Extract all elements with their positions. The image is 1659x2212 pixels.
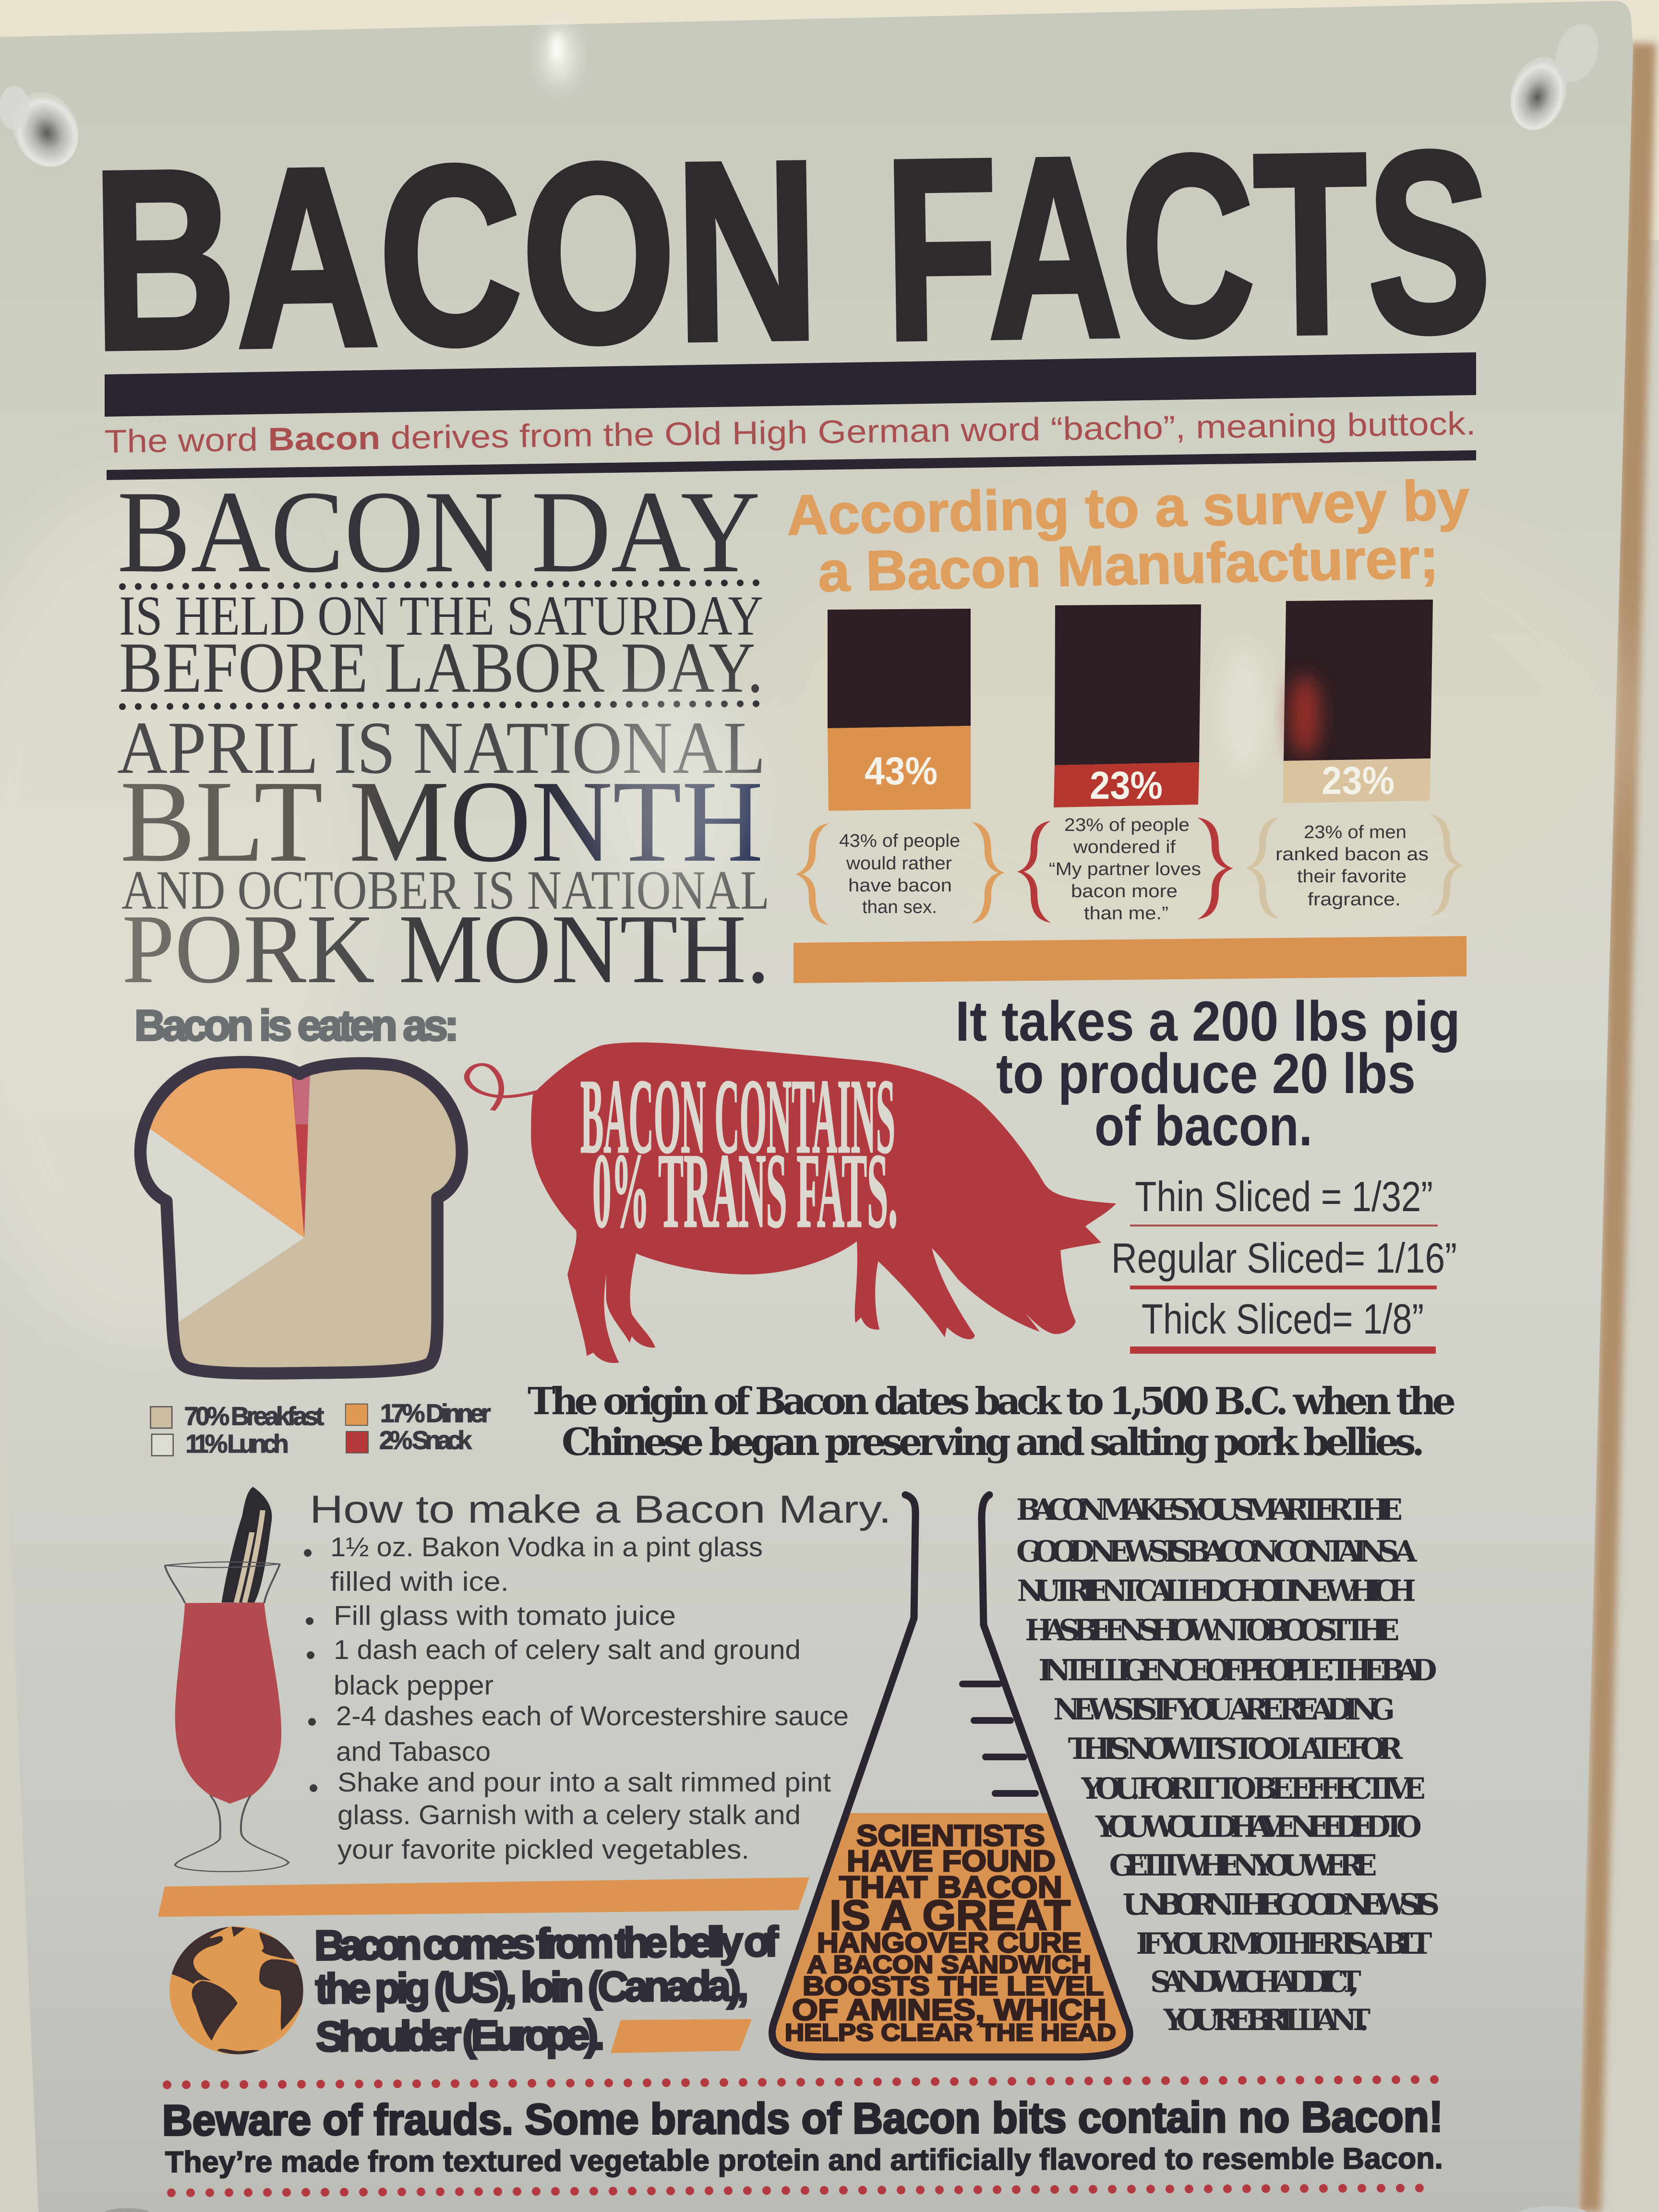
board lighting (0, 26, 1632, 1344)
survey heading (786, 469, 1470, 604)
text: belly of the pig: Bacon comes from the belly of (314, 1918, 779, 1969)
flask text: HELPS CLEAR THE HEAD (785, 2019, 1116, 2046)
heading: bacon is eaten as: Bacon is eaten as: (134, 1002, 459, 1050)
recipe list: 2-4 dashes each of Worcestershire sauce (336, 1701, 849, 1731)
survey heading: a Bacon Manufacturer; (817, 527, 1439, 604)
text: bacon makes you smarter: THIS NOW IT’S TOO LATE FOR (1068, 1732, 1403, 1766)
glare over left column (590, 686, 754, 898)
survey heading: According to a survey by (786, 469, 1470, 547)
slice thickness list: Thin Sliced = 1/32” (1135, 1173, 1433, 1220)
pie legend: 70% Breakfast (184, 1403, 324, 1431)
flask ticks (962, 1684, 1035, 1793)
cocktail glass (165, 1487, 289, 1872)
bar 2: 23% (1090, 764, 1163, 807)
bar 2 (1054, 604, 1201, 807)
recipe list: black pepper (334, 1670, 493, 1701)
caption 2: wondered if (1073, 837, 1176, 857)
title (91, 98, 1493, 403)
recipe list: filled with ice. (330, 1566, 509, 1597)
caption 2: than me.” (1084, 903, 1168, 924)
text: bacon makes you smarter: YOU. FOR IT TO BE EFFECTIVE (1081, 1772, 1426, 1806)
icon: bacon strip (222, 1487, 272, 1602)
text: 0% TRANS FATS. (592, 1132, 898, 1250)
text: april: APRIL IS NATIONAL (117, 706, 766, 789)
bar 3 (1283, 600, 1433, 803)
text: bacon makes you smarter: HAS BEEN SHOWN TO BOOST THE (1025, 1613, 1400, 1647)
subtitle: The word Bacon derives from the Old High German word “bacho”, meaning buttock. (104, 405, 1476, 460)
panel: survey (786, 469, 1470, 925)
suction cups: bottom (103, 2206, 1587, 2212)
text: origin of bacon: Chinese began preserving and salting pork bellies. (562, 1420, 1425, 1464)
title rule (105, 352, 1476, 417)
text: bacon makes you smarter: INTELLIGENCE OF PEOPLE. THE BAD (1038, 1654, 1437, 1688)
caption 3: ranked bacon as (1275, 844, 1429, 865)
caption 3: 23% of men (1304, 822, 1407, 842)
recipe list: 1 dash each of celery salt and ground (334, 1635, 801, 1665)
text: blt month: BLT MONTH (120, 757, 763, 886)
text: bacon makes you smarter: YOU WOULD HAVE NEEDED TO (1095, 1810, 1422, 1844)
caption 1: 43% of people (839, 831, 960, 851)
recipe list: Shake and pour into a salt rimmed pint (337, 1767, 831, 1798)
pie chart: bread slice (127, 1039, 469, 1384)
slice thickness list: Thick Sliced= 1/8” (1142, 1295, 1424, 1343)
flask outline (772, 1495, 1130, 2057)
flask text: HANGOVER CURE (817, 1927, 1082, 1959)
bar 3: 23% (1322, 759, 1395, 803)
pie legend (151, 1399, 491, 1458)
pig text: trans fats (580, 1058, 898, 1250)
flask liquid (772, 1813, 1130, 2057)
pig silhouette (467, 1042, 1116, 1363)
caption 2: 23% of people (1064, 815, 1190, 835)
text: bacon makes you smarter: SANDWICH ADDICT, (1150, 1965, 1361, 1999)
text: origin of bacon (528, 1380, 1456, 1464)
recipe list: Fill glass with tomato juice (334, 1600, 676, 1631)
flask text: A BACON SANDWICH (807, 1951, 1091, 1979)
slice thickness list (1111, 1173, 1457, 1354)
text: saturday: IS HELD ON THE SATURDAY (119, 584, 763, 647)
suction cup: top right (1502, 18, 1605, 137)
text: bacon makes you smarter: NUTRIENT CALLED CHOLINE WHICH (1017, 1574, 1416, 1608)
caption 1: than sex. (862, 897, 937, 917)
pie legend: 17% Dinner (380, 1399, 491, 1428)
pie legend: 11% Lunch (185, 1430, 289, 1458)
text: pork month: PORK MONTH. (122, 894, 770, 1004)
flask text: HAVE FOUND (847, 1845, 1056, 1878)
wall top highlight (0, 0, 1659, 240)
flask (772, 1495, 1130, 2057)
flask text (785, 1819, 1116, 2046)
survey orange band (793, 936, 1467, 983)
caption 2: bacon more (1071, 881, 1178, 902)
recipe list (304, 1532, 849, 1865)
text: 200 lbs pig: It takes a 200 lbs pig (955, 990, 1460, 1053)
flask text: IS A GREAT (830, 1891, 1070, 1939)
text: bacon makes you smarter: YOU’RE BRILLIANT. (1163, 2003, 1370, 2037)
text: belly of the pig: Shoulder (Europe). (315, 2011, 605, 2060)
text: bacon makes you smarter: GET IT WHEN YOU WERE (1109, 1849, 1377, 1883)
text: 200 lbs pig: of bacon. (1094, 1094, 1312, 1158)
caption 3: fragrance. (1308, 890, 1401, 910)
subtitle rule (107, 450, 1476, 480)
text: bacon makes you smarter (1016, 1493, 1440, 2037)
wall shadow strip (1579, 43, 1656, 2212)
text: bacon makes you smarter: UNBORN. THE GOOD NEWS IS (1123, 1888, 1440, 1922)
text: october: AND OCTOBER IS NATIONAL (121, 860, 769, 921)
slice thickness list: Regular Sliced= 1/16” (1111, 1234, 1457, 1282)
text: belly of the pig: the pig (US), loin (Canada), (315, 1962, 749, 2012)
recipe list: glass. Garnish with a celery stalk and (337, 1800, 801, 1830)
text: origin of bacon: The origin of Bacon dates back to 1,500 B.C. when the (528, 1380, 1456, 1423)
flask text: SCIENTISTS (856, 1819, 1045, 1852)
text: bacon makes you smarter: BACON MAKES YOU SMARTER. THE (1016, 1493, 1403, 1527)
pie legend: 2% Snack (379, 1426, 472, 1455)
footer note: They’re made from textured vegetable protein and artificially flavored to resemble Bacon. (165, 2142, 1443, 2179)
caption 3: their favorite (1297, 866, 1407, 887)
caption 1 (795, 822, 1005, 925)
flask text: OF AMINES, WHICH (792, 1994, 1106, 2027)
text: bacon makes you smarter: IF YOUR MOTHER IS A BLT (1136, 1927, 1432, 1961)
heading: bacon day: BACON DAY (117, 467, 760, 597)
recipe list: and Tabasco (336, 1736, 491, 1767)
flask text: BOOSTS THE LEVEL (803, 1971, 1104, 2001)
text: 200 lbs pig: to produce 20 lbs (996, 1042, 1416, 1106)
flask text: THAT BACON (839, 1870, 1062, 1904)
small orange band (611, 2019, 752, 2053)
caption 1: would rather (846, 854, 952, 874)
recipe orange band (158, 1877, 809, 1917)
footer (162, 2080, 1443, 2193)
footer heading: Beware of frauds. Some brands of Bacon bits contain no Bacon! (162, 2093, 1443, 2145)
recipe list: 1½ oz. Bakon Vodka in a pint glass (330, 1532, 763, 1563)
recipe list: your favorite pickled vegetables. (337, 1834, 749, 1865)
text: BACON CONTAINS (580, 1058, 895, 1176)
suction cup: top left (0, 82, 91, 178)
text: labor day: BEFORE LABOR DAY. (119, 628, 763, 708)
bar 1: 43% (865, 749, 938, 793)
caption 2 (1017, 815, 1233, 924)
icon: globe (168, 1926, 307, 2055)
caption 2: “My partner loves (1049, 859, 1201, 879)
panel: bacon day (117, 467, 770, 1004)
bar 1 (828, 609, 971, 811)
text: belly of the pig (314, 1918, 779, 2060)
recipe heading: How to make a Bacon Mary. (310, 1488, 891, 1531)
text: bacon makes you smarter: GOOD NEWS IS BACON CONTAINS A (1016, 1535, 1417, 1569)
recipe (304, 1488, 891, 1865)
glare by bars (1222, 648, 1265, 773)
title: BACON (91, 108, 821, 403)
text: bacon makes you smarter: NEWS IS IF YOU ARE READING (1053, 1693, 1395, 1727)
text: 200 lbs pig (955, 990, 1460, 1158)
caption 1: have bacon (848, 876, 952, 896)
caption 3 (1246, 815, 1464, 919)
